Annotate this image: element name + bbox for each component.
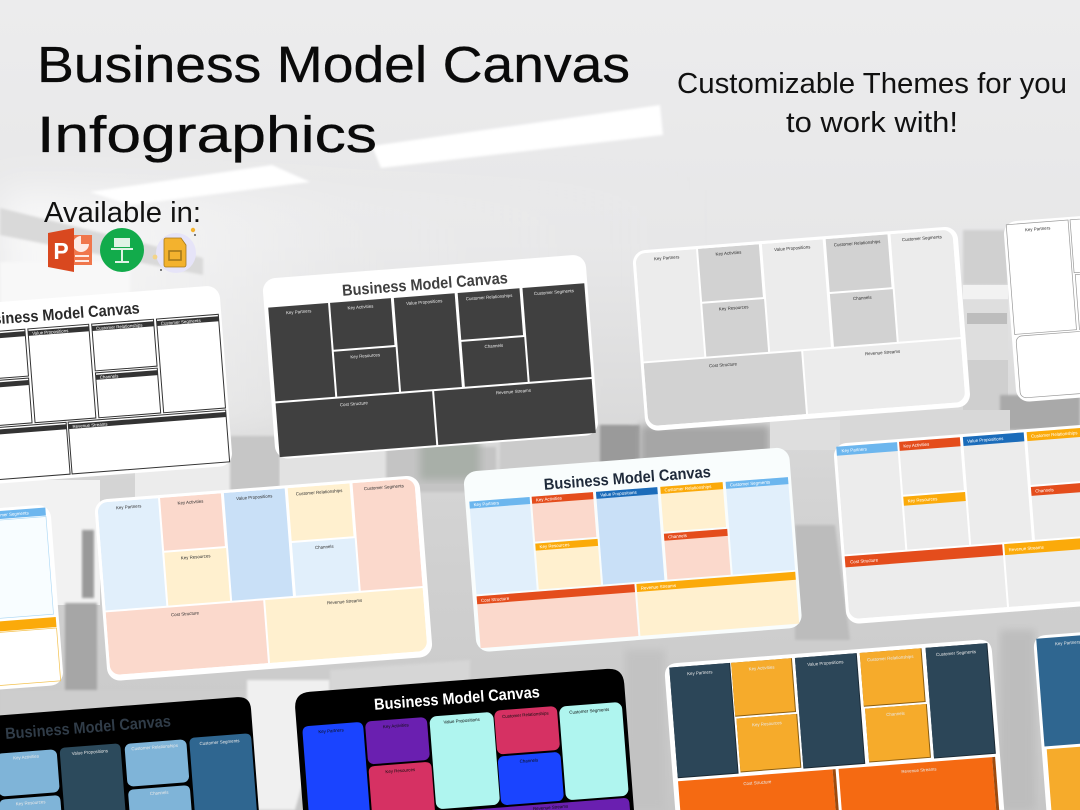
bevel labels: Key Activities bbox=[749, 664, 775, 672]
header labels: Customer Relationships bbox=[664, 484, 712, 493]
bevel labels bbox=[687, 649, 986, 790]
header canvas cells bbox=[469, 497, 537, 594]
blue labels: Customer Segments bbox=[199, 738, 240, 746]
bright tiles bbox=[302, 722, 370, 810]
bright labels: Customer Relationships bbox=[502, 710, 550, 719]
grey cells bbox=[635, 229, 966, 426]
yellow cell bbox=[0, 628, 61, 693]
bevel labels: Cost Structure bbox=[743, 779, 772, 786]
navy shade bbox=[669, 643, 996, 778]
blue labels: Channels bbox=[150, 790, 169, 796]
header labels: Value Propositions bbox=[600, 490, 638, 498]
subtitle: Customizable Themes for you bbox=[677, 68, 1067, 100]
sketch labels: Customer Relationships bbox=[96, 322, 143, 331]
panel: white outlined canvas, top right bbox=[1003, 197, 1080, 402]
right labels: Key Partners bbox=[841, 446, 868, 453]
panel: grey canvas with coloured headers, right bbox=[833, 419, 1080, 624]
dark cells bbox=[268, 283, 596, 457]
grey labels: Key Resources bbox=[719, 304, 749, 312]
card title: Business Model Canvas bbox=[374, 684, 540, 714]
header labels: Cost Structure bbox=[481, 596, 510, 603]
grey labels: Customer Segments bbox=[902, 234, 943, 242]
grey header cells bbox=[836, 422, 1080, 619]
blue label: Key Partners bbox=[1055, 639, 1080, 646]
card title: Business Model Canvas bbox=[342, 270, 508, 300]
grey labels: Channels bbox=[853, 295, 873, 301]
pastel labels: Cost Structure bbox=[171, 610, 200, 617]
panel: pastel canvas, left edge bbox=[0, 504, 64, 709]
title: Infographics bbox=[37, 106, 377, 163]
pale header bbox=[0, 508, 46, 520]
pastel labels: Customer Relationships bbox=[296, 488, 343, 496]
panel: light grey canvas bbox=[632, 226, 971, 431]
right headers bbox=[836, 442, 898, 456]
amber cell bbox=[1047, 745, 1080, 810]
bevel labels: Customer Segments bbox=[936, 649, 977, 657]
right labels: Customer Relationships bbox=[1031, 430, 1078, 439]
sketch labels: Channels bbox=[100, 373, 119, 380]
panel: black canvas with bright tiles bbox=[294, 668, 634, 810]
right labels: Key Resources bbox=[907, 496, 938, 503]
card title: Business Model Canvas bbox=[543, 463, 711, 494]
dark labels: Cost Structure bbox=[340, 400, 369, 407]
pastel labels: Key Partners bbox=[116, 503, 142, 510]
title bbox=[37, 36, 630, 163]
icon: Google Slides bbox=[153, 228, 196, 273]
bright labels: Customer Segments bbox=[569, 707, 610, 715]
grey labels: Revenue Streams bbox=[865, 349, 901, 356]
header labels: Revenue Streams bbox=[641, 583, 677, 591]
dark labels: Customer Segments bbox=[534, 288, 575, 296]
pastel labels bbox=[116, 483, 413, 621]
pastel labels: Revenue Streams bbox=[327, 598, 363, 605]
bright labels: Channels bbox=[519, 757, 539, 764]
pastel labels: Key Resources bbox=[181, 553, 211, 561]
icon: PowerPoint: P bbox=[53, 238, 69, 264]
blue labels bbox=[12, 738, 244, 806]
bright labels: Value Propositions bbox=[443, 717, 481, 725]
grey labels: Key Activities bbox=[715, 250, 742, 257]
bright labels: Key Resources bbox=[385, 767, 416, 774]
bevel labels: Channels bbox=[886, 711, 906, 717]
blue labels: Key Activities bbox=[13, 753, 40, 760]
pastel labels: Key Activities bbox=[177, 499, 204, 506]
panel: pastel canvas, no headers bbox=[94, 475, 433, 681]
right labels: Revenue Streams bbox=[1008, 545, 1045, 552]
grey labels: Value Propositions bbox=[774, 244, 811, 252]
bevel labels: Key Partners bbox=[687, 669, 713, 676]
header labels: Customer Segments bbox=[730, 479, 771, 488]
bright labels bbox=[318, 706, 617, 810]
dark labels: Key Partners bbox=[286, 308, 312, 315]
blue labels: Customer Relationships bbox=[131, 743, 179, 751]
sketch cells bbox=[0, 314, 230, 486]
dark labels: Key Resources bbox=[350, 352, 381, 359]
icon: PowerPoint bbox=[48, 228, 92, 272]
panel: navy and orange bevelled canvas bbox=[664, 639, 1004, 810]
bevel labels: Revenue Streams bbox=[901, 766, 937, 774]
bevel labels: Value Propositions bbox=[807, 659, 844, 667]
sketch labels bbox=[32, 318, 209, 432]
sketch labels: Value Propositions bbox=[32, 328, 69, 336]
panel: dark grey canvas bbox=[262, 254, 599, 459]
sketch headers bbox=[0, 316, 226, 441]
title: Business Model Canvas bbox=[37, 36, 630, 93]
available in label: Available in: bbox=[44, 197, 201, 229]
right labels: Channels bbox=[1035, 487, 1055, 494]
right labels: Value Propositions bbox=[967, 436, 1004, 444]
sketch labels: Customer Segments bbox=[161, 318, 202, 326]
header labels bbox=[473, 479, 778, 603]
panel: pastel canvas with title and headers bbox=[463, 447, 803, 652]
pastel cells bbox=[97, 478, 428, 675]
pale cell bbox=[0, 516, 53, 619]
bevel cells bbox=[669, 663, 738, 777]
icon: Keynote bbox=[100, 228, 144, 272]
grey labels bbox=[654, 234, 951, 372]
subtitle: to work with! bbox=[786, 107, 958, 139]
dark labels: Revenue Streams bbox=[496, 388, 532, 395]
subtitle bbox=[677, 68, 1067, 139]
blue labels: Key Resources bbox=[16, 799, 46, 806]
panel: navy and orange canvas, bottom right bbox=[1033, 611, 1080, 810]
blue labels: Value Propositions bbox=[72, 748, 109, 756]
grey labels: Customer Relationships bbox=[834, 239, 881, 247]
header labels: Key Partners bbox=[473, 500, 500, 507]
header labels: Channels bbox=[668, 533, 688, 539]
card title: Business Model Canvas bbox=[5, 713, 172, 743]
dark labels: Customer Relationships bbox=[466, 293, 513, 301]
bevel shade bbox=[731, 648, 931, 773]
bright labels: Key Activities bbox=[383, 722, 410, 729]
grey labels: Cost Structure bbox=[709, 361, 738, 368]
sketch labels: Revenue Streams bbox=[72, 421, 108, 429]
bevel labels: Key Resources bbox=[752, 720, 783, 727]
bright labels: Key Partners bbox=[318, 727, 345, 734]
header labels: Key Activities bbox=[536, 495, 563, 502]
right labels: Cost Structure bbox=[850, 557, 879, 565]
dark labels: Channels bbox=[484, 343, 504, 349]
bevel labels: Customer Relationships bbox=[867, 654, 914, 662]
outlined label: Key Partners bbox=[1025, 225, 1051, 232]
pastel labels: Value Propositions bbox=[236, 493, 273, 501]
pastel labels: Customer Segments bbox=[364, 483, 405, 491]
right labels: Key Activities bbox=[903, 442, 930, 449]
pastel labels: Channels bbox=[315, 544, 335, 550]
right labels bbox=[841, 430, 1080, 565]
dark labels: Value Propositions bbox=[406, 298, 443, 306]
blue tiles bbox=[0, 749, 60, 797]
panel: white sketch canvas, top left bbox=[0, 285, 233, 490]
panel: navy canvas, bottom left bbox=[0, 696, 259, 810]
header labels: Key Resources bbox=[539, 542, 570, 549]
coloured headers bbox=[469, 497, 530, 509]
outlined cells bbox=[1006, 213, 1080, 398]
grey labels: Key Partners bbox=[654, 254, 680, 261]
blue cell bbox=[1036, 634, 1080, 746]
dark labels bbox=[286, 288, 582, 411]
dark labels: Key Activities bbox=[347, 303, 374, 311]
